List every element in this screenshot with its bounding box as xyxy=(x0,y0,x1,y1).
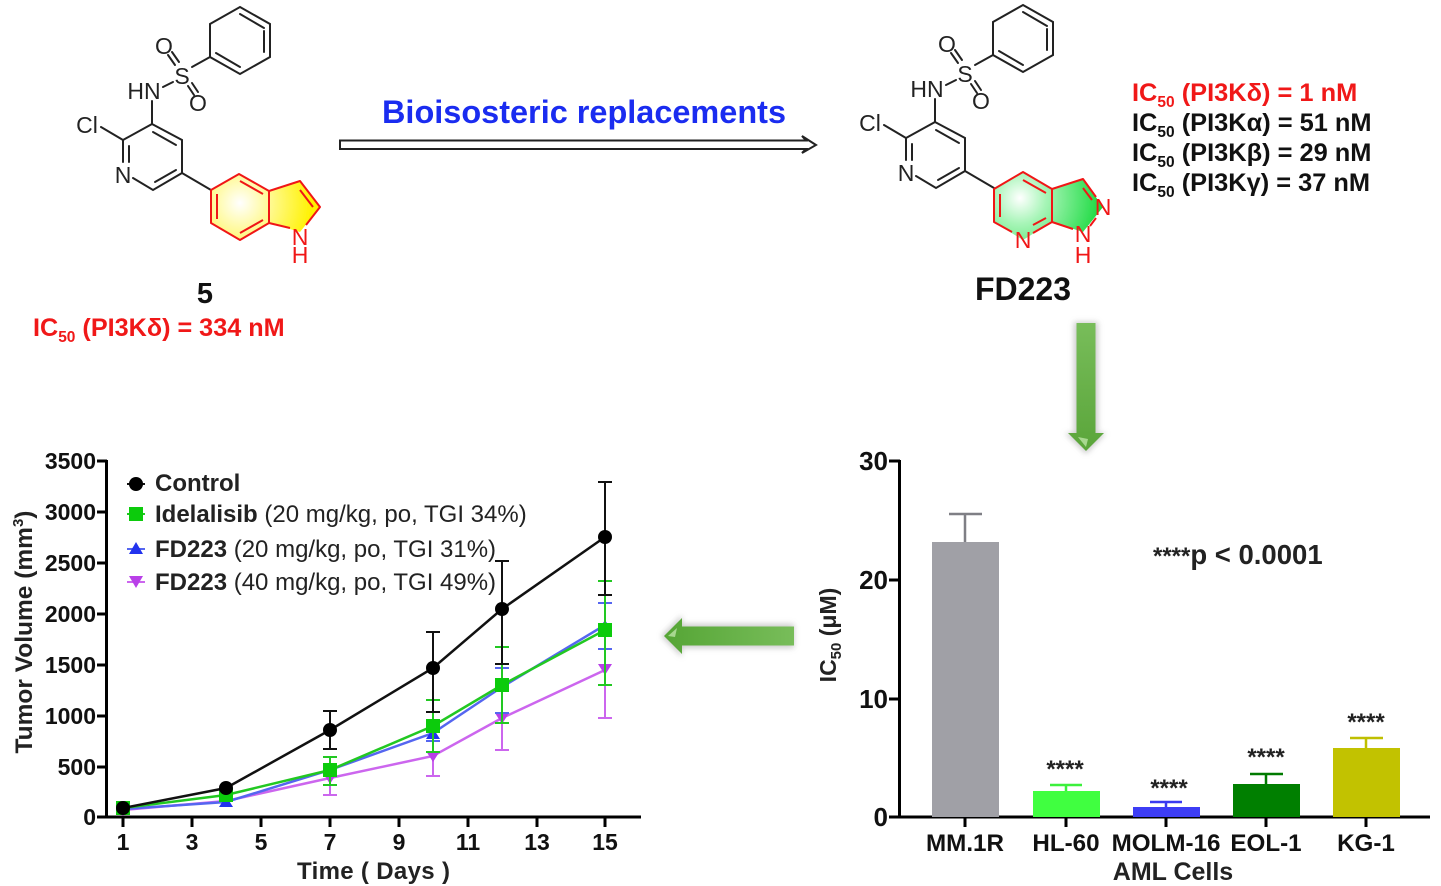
azaindazole highlight: N xyxy=(1015,227,1031,253)
y axis: 500 xyxy=(58,754,96,780)
text block: FD223 IC50 values: 50 xyxy=(1157,154,1175,171)
x axis xyxy=(117,817,618,855)
molecule: FD223 xyxy=(859,5,1111,268)
molecule: compound 5 xyxy=(76,7,320,268)
y axis: 3500 xyxy=(45,448,96,474)
text block: FD223 IC50 values: 50 xyxy=(1157,184,1175,201)
text block: FD223 IC50 values: IC xyxy=(1132,79,1157,107)
text block: FD223 IC50 values: (PI3Kγ) = 37 nM xyxy=(1175,169,1370,197)
legend: Control xyxy=(155,470,240,497)
y axis: 2500 xyxy=(45,550,96,576)
y axis: 1500 xyxy=(45,652,96,678)
y-axis title: (μM) xyxy=(815,588,841,643)
chart: tumor volume line chart xyxy=(10,448,641,885)
legend: FD223 (40 mg/kg, po, TGI 49%) xyxy=(155,569,496,596)
significance stars: **** xyxy=(1046,756,1084,783)
indole highlight: N xyxy=(292,224,308,250)
heading: bioisosteric replacements: Bioisosteric replacements xyxy=(382,94,786,130)
y axis: 2000 xyxy=(45,601,96,627)
azaindazole highlight xyxy=(994,172,1111,268)
y axis: 1000 xyxy=(45,703,96,729)
axes: 10 xyxy=(859,684,888,714)
label: compound 5 IC50: 50 xyxy=(58,329,75,346)
text block: FD223 IC50 values: (PI3Kβ) = 29 nM xyxy=(1175,139,1371,167)
azaindazole highlight: N xyxy=(1075,221,1091,247)
azaindazole highlight: H xyxy=(1075,242,1091,268)
significance stars xyxy=(1046,709,1385,802)
category labels: MM.1R xyxy=(926,830,1004,857)
series: FD223 40 mg/kg xyxy=(116,664,612,816)
label: compound 5 IC50: IC xyxy=(33,314,58,342)
x axis: 5 xyxy=(255,829,268,855)
y-axis title: 3 xyxy=(10,519,27,527)
y-axis title: ) xyxy=(11,511,38,519)
axes xyxy=(859,446,1430,832)
x-axis title: AML Cells xyxy=(1113,858,1233,886)
indole highlight xyxy=(211,174,320,268)
y axis: 3000 xyxy=(45,499,96,525)
indole highlight: H xyxy=(292,242,308,268)
category labels: KG-1 xyxy=(1337,830,1395,857)
arrow: green down arrow xyxy=(1065,322,1106,454)
label: compound 5: 5 xyxy=(197,278,213,310)
x axis: 9 xyxy=(393,829,405,855)
x axis: 1 xyxy=(117,829,130,855)
x axis: 7 xyxy=(324,829,336,855)
arrow: green left arrow xyxy=(661,615,794,657)
category labels: HL-60 xyxy=(1032,830,1100,857)
axes: 0 xyxy=(874,802,888,832)
x axis: 11 xyxy=(456,829,480,855)
text block: FD223 IC50 values xyxy=(1132,79,1372,201)
bar: KG-1 xyxy=(1333,738,1400,817)
text block: FD223 IC50 values: (PI3Kα) = 51 nM xyxy=(1175,109,1372,137)
text block: FD223 IC50 values: (PI3Kδ) = 1 nM xyxy=(1175,79,1357,107)
bar: EOL-1 xyxy=(1233,774,1300,817)
bar: MM.1R xyxy=(932,514,999,817)
x axis: 15 xyxy=(592,829,618,855)
y axis xyxy=(45,448,641,830)
axes: 20 xyxy=(859,565,888,595)
text block: FD223 IC50 values: IC xyxy=(1132,139,1157,167)
significance stars: **** xyxy=(1150,775,1188,802)
category labels: MOLM-16 xyxy=(1112,830,1220,857)
significance stars: **** xyxy=(1247,744,1285,771)
y-axis title: IC xyxy=(815,659,841,682)
text block: FD223 IC50 values: IC xyxy=(1132,109,1157,137)
category labels xyxy=(926,830,1395,857)
y axis: 0 xyxy=(83,804,96,830)
arrow: hollow reaction arrow xyxy=(340,136,816,153)
series: Idelalisib xyxy=(116,581,612,815)
label: FD223: FD223 xyxy=(975,271,1071,307)
series: Control xyxy=(116,482,612,815)
chart: IC50 bar chart xyxy=(815,446,1430,886)
x axis: 13 xyxy=(524,829,550,855)
text block: FD223 IC50 values: 50 xyxy=(1157,124,1175,141)
bar: MOLM-16 xyxy=(1133,802,1200,817)
label: compound 5 IC50: (PI3Kδ) = 334 nM xyxy=(75,314,285,342)
axes: 30 xyxy=(859,446,888,476)
text block: FD223 IC50 values: 50 xyxy=(1157,94,1175,111)
p-value note: ****p < 0.0001 xyxy=(1153,539,1323,570)
x axis: 3 xyxy=(186,829,198,855)
y-axis title: 50 xyxy=(828,643,845,659)
category labels: EOL-1 xyxy=(1230,830,1302,857)
series: FD223 20 mg/kg xyxy=(116,603,612,815)
x-axis title: Time ( Days ) xyxy=(297,858,450,885)
legend xyxy=(127,470,527,596)
legend: Idelalisib (20 mg/kg, po, TGI 34%) xyxy=(155,501,527,528)
significance stars: **** xyxy=(1347,709,1385,736)
bar: HL-60 xyxy=(1033,785,1100,817)
azaindazole highlight: N xyxy=(1095,194,1111,220)
text block: FD223 IC50 values: IC xyxy=(1132,169,1157,197)
legend: FD223 (20 mg/kg, po, TGI 31%) xyxy=(155,536,496,563)
y-axis title: Tumor Volume (mm xyxy=(11,527,38,753)
